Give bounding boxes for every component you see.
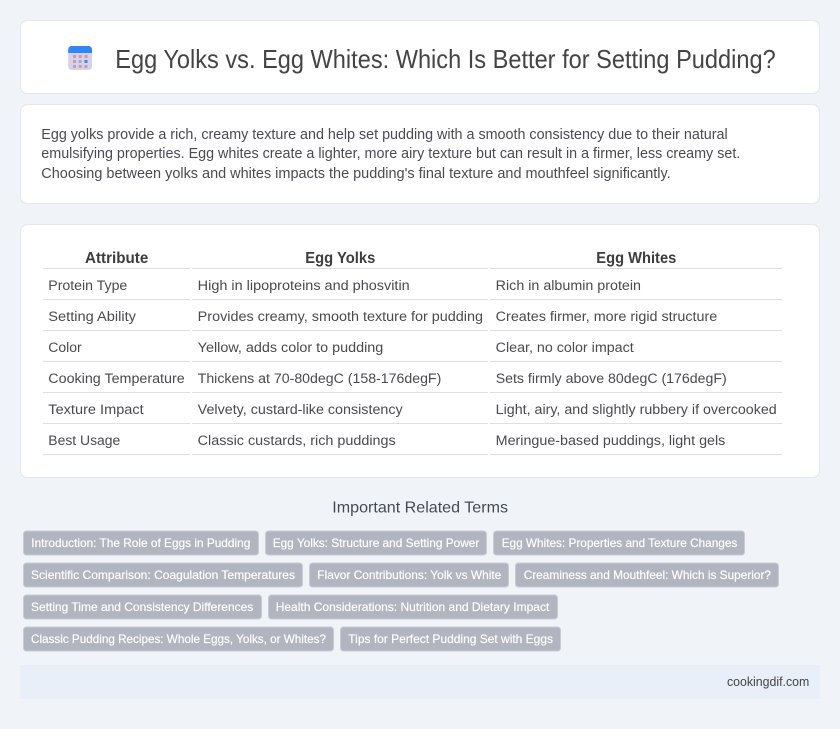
panel: comparison table: [20, 224, 820, 478]
table row: protein type: Rich in albumin protein: [496, 278, 641, 294]
tag: flavor contributions: Flavor Contributions: Yolk vs White: [317, 568, 502, 582]
icon: calendar grid: [68, 46, 92, 70]
table row: setting ability: Setting Ability: [48, 309, 137, 325]
tag: setting time: [24, 595, 262, 619]
title: Egg Yolks vs. Egg Whites: Which Is Better for Setting Pudding?: [115, 46, 776, 74]
table row: best usage: [48, 433, 725, 449]
tag: scientific comparison: Scientific Comparison: Coagulation Temperatures: [31, 568, 295, 582]
tag: classic recipes: Classic Pudding Recipes: Whole Eggs, Yolks, or Whites?: [31, 632, 326, 646]
table row: color: Color: [48, 340, 82, 356]
table row: protein type: Protein Type: [48, 278, 127, 294]
tag: setting time: Setting Time and Consistency Differences: [31, 600, 253, 614]
table row: cooking temperature: Thickens at 70-80degC (158-176degF): [198, 371, 441, 387]
footer: [20, 665, 820, 699]
text block: description: [41, 127, 740, 182]
text block: description: emulsifying properties. Egg whites create a lighter, more airy texture but can result in a firmer, less creamy set.: [41, 146, 740, 162]
table header: [85, 250, 676, 267]
tag: egg yolks: Egg Yolks: Structure and Setting Power: [273, 536, 479, 550]
table row: protein type: High in lipoproteins and phosvitin: [198, 278, 410, 294]
panel: related term tags: [24, 531, 778, 651]
table row: color: Yellow, adds color to pudding: [198, 340, 383, 356]
table row: texture impact: Light, airy, and slightly rubbery if overcooked: [496, 402, 777, 418]
tag: introduction: Introduction: The Role of Eggs in Pudding: [31, 536, 250, 550]
table row: protein type: [48, 278, 641, 294]
tag: egg whites: [494, 531, 744, 555]
tag: classic recipes: [24, 627, 334, 651]
table row: setting ability: [48, 309, 717, 325]
table row: best usage: Classic custards, rich puddings: [198, 433, 396, 449]
tag: flavor contributions: [310, 563, 508, 587]
table header: Egg Whites: [596, 250, 676, 267]
heading: important related terms: Important Related Terms: [332, 500, 508, 517]
tag: creaminess: [516, 563, 778, 587]
footer source text: cookingdif.com: [727, 674, 809, 689]
table row: color: [48, 340, 634, 356]
table row: best usage: Best Usage: [48, 433, 120, 449]
table row: cooking temperature: Sets firmly above 80degC (176degF): [496, 371, 727, 387]
tag: creaminess: Creaminess and Mouthfeel: Which is Superior?: [524, 568, 771, 582]
text block: description: Choosing between yolks and whites impacts the pudding's final texture and mouthfeel significantly.: [41, 166, 671, 182]
table row: best usage: Meringue-based puddings, light gels: [496, 433, 725, 449]
table row: texture impact: Texture Impact: [48, 402, 144, 418]
text block: description: Egg yolks provide a rich, creamy texture and help set pudding with a smooth consistency due to their natural: [41, 127, 728, 143]
table row: texture impact: Velvety, custard-like consistency: [198, 402, 404, 418]
table row: setting ability: Provides creamy, smooth texture for pudding: [198, 309, 483, 325]
table row: texture impact: [48, 402, 777, 418]
table header: Egg Yolks: [305, 250, 375, 267]
tag: scientific comparison: [24, 563, 302, 587]
tag: health considerations: [268, 595, 558, 619]
panel: description: [20, 104, 820, 204]
table row: color: Clear, no color impact: [496, 340, 634, 356]
tag: tips: [340, 627, 560, 651]
table row: setting ability: Creates firmer, more rigid structure: [496, 309, 717, 325]
table row: cooking temperature: Cooking Temperature: [48, 371, 185, 387]
tag: health considerations: Health Considerations: Nutrition and Dietary Impact: [276, 600, 550, 614]
table row: cooking temperature: [48, 371, 727, 387]
tag: tips: Tips for Perfect Pudding Set with Eggs: [348, 632, 553, 646]
tag: egg whites: Egg Whites: Properties and Texture Changes: [502, 536, 737, 550]
table header: Attribute: [85, 250, 149, 267]
tag: egg yolks: [266, 531, 486, 555]
tag: introduction: [24, 531, 258, 555]
panel: header: [20, 20, 820, 94]
